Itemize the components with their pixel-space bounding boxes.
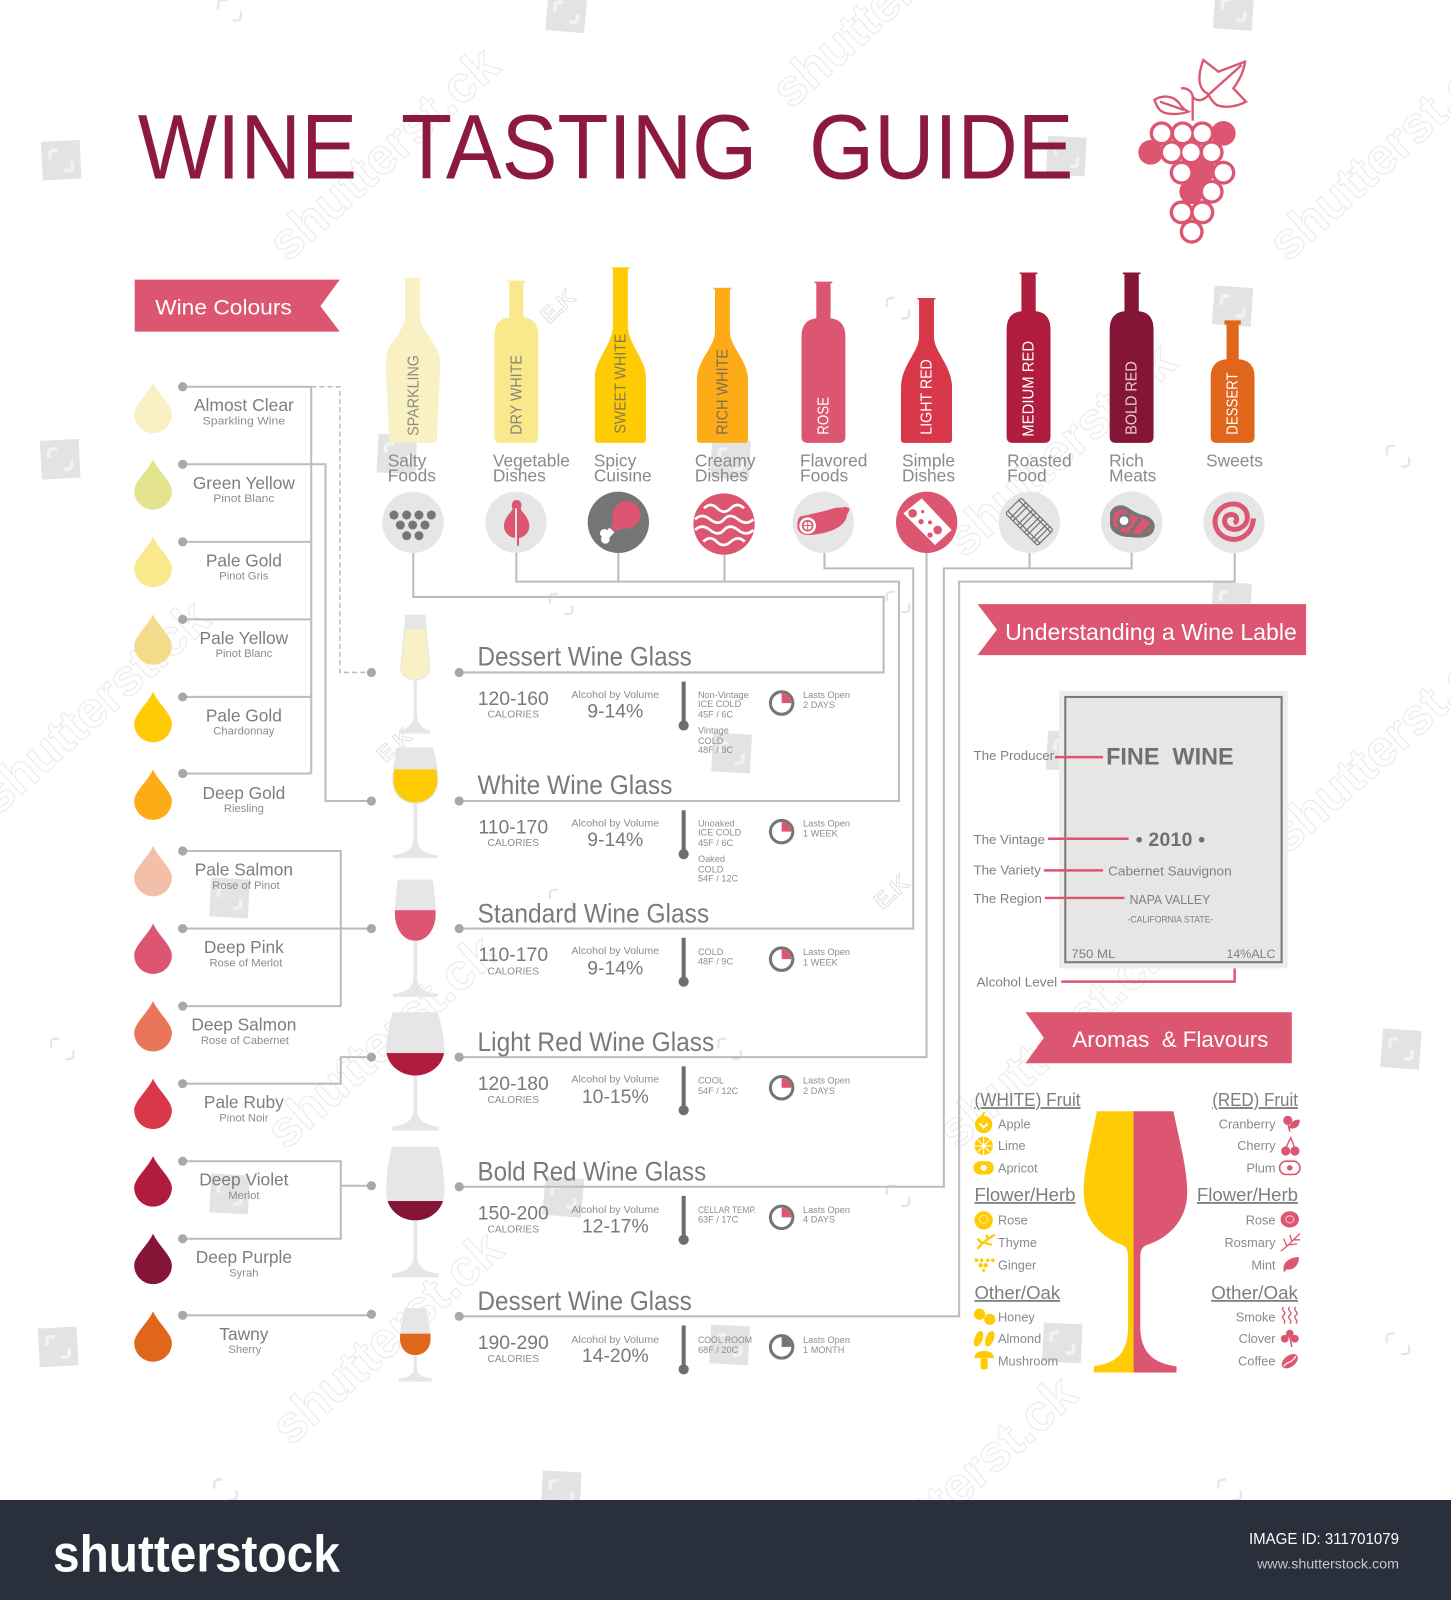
stats: Lasts Open — [803, 819, 850, 829]
stats: 68F / 20C — [698, 1345, 739, 1355]
stats: COLD — [698, 864, 724, 874]
banner: wine colours — [135, 280, 340, 332]
title: Bold Red Wine Glass — [478, 1157, 706, 1187]
colour: deep pink: Rose of Merlot — [209, 957, 283, 969]
stats: 54F / 12C — [698, 1086, 739, 1096]
stats: 12-17% — [582, 1216, 649, 1238]
panel: glass 3 standard — [393, 880, 850, 997]
stats: CALORIES — [487, 709, 539, 720]
title: White Wine Glass — [478, 770, 672, 800]
panel: food pairing labels: Sweets — [1206, 450, 1263, 470]
list items: Thyme — [998, 1235, 1037, 1250]
panel: glass 6 dessert — [399, 1286, 850, 1382]
bottle: bold red: BOLD RED — [1124, 361, 1141, 435]
colour: pale yellow: Pale Yellow — [200, 628, 289, 648]
panel: wine label diagram — [973, 691, 1288, 990]
colour: deep salmon: Rose of Cabernet — [201, 1035, 290, 1047]
icons: white aromas — [972, 1112, 996, 1369]
panel: glass 4 light red — [385, 1012, 850, 1131]
list items: Mint — [1251, 1257, 1276, 1272]
stats: COLD — [698, 736, 724, 746]
stats: 14-20% — [582, 1345, 649, 1367]
callout: the variety — [973, 862, 1103, 877]
heading: flower herb: Flower/Herb — [974, 1184, 1075, 1205]
stats: 1 MONTH — [803, 1345, 844, 1355]
stats: 45F / 6C — [698, 709, 733, 719]
watermark overlay: E.K — [536, 285, 580, 328]
glass illustration — [385, 1147, 446, 1278]
callout: the variety: The Variety — [973, 862, 1041, 877]
stats: Alcohol by Volume — [571, 1205, 660, 1216]
bottle: dessert: DESSERT — [1225, 372, 1242, 435]
stats: Alcohol by Volume — [571, 946, 660, 957]
panel: food pairing labels: Food — [1007, 466, 1047, 486]
icon: spicy chicken leg — [588, 492, 649, 553]
stats: 48F / 9C — [698, 745, 733, 755]
callout: alcohol level — [977, 968, 1235, 990]
stats: ICE COLD — [698, 828, 742, 838]
callout: the region: The Region — [973, 891, 1042, 906]
panel: food pairing labels — [388, 450, 1263, 486]
glass illustration — [393, 880, 438, 997]
colour: tawny: Sherry — [228, 1344, 262, 1356]
bottle: rich white — [697, 288, 748, 443]
panel: glass 5 bold red — [385, 1147, 850, 1278]
title: Standard Wine Glass — [478, 898, 709, 928]
label card: Cabernet Sauvignon — [1108, 864, 1232, 879]
title: Light Red Wine Glass — [478, 1027, 714, 1057]
label card: • 2010 • — [1136, 829, 1205, 851]
colour: pale salmon — [134, 846, 293, 896]
panel: food pairing labels: Dishes — [493, 466, 546, 486]
stats — [478, 810, 850, 884]
stats: Lasts Open — [803, 1076, 850, 1086]
heading: red fruit: (RED) Fruit — [1212, 1089, 1298, 1110]
stats: COOL ROOM — [698, 1335, 752, 1345]
list items: Lime — [998, 1138, 1026, 1153]
callout: the vintage: The Vintage — [973, 832, 1045, 847]
heading: white fruit: (WHITE) Fruit — [974, 1089, 1081, 1110]
watermark overlay: shutterst.ck — [933, 331, 1187, 567]
colour: green yellow — [134, 459, 295, 510]
panel: wine bottles — [386, 267, 1255, 443]
callout: the producer: The Producer — [973, 748, 1055, 763]
panel: food pairing labels: Flavored — [800, 450, 867, 470]
panel: glass 1 dessert (flute) — [399, 615, 850, 755]
panel: food pairing labels: Simple — [902, 450, 955, 470]
colour: pale yellow: Pinot Blanc — [215, 648, 273, 660]
stats — [478, 682, 850, 755]
watermark overlay: shutterst.ck — [257, 35, 510, 271]
panel: food pairing labels: Dishes — [902, 466, 955, 486]
panel: food pairing labels: Creamy — [695, 450, 756, 470]
stats: 48F / 9C — [698, 956, 733, 966]
title: WINE — [138, 97, 357, 199]
colour: deep salmon: Deep Salmon — [191, 1015, 296, 1035]
heading: other oak: Other/Oak — [974, 1282, 1061, 1303]
colour: green yellow: Green Yellow — [193, 473, 295, 493]
stats — [478, 938, 850, 987]
stats: 2 DAYS — [803, 1086, 835, 1096]
icon: salty foods — [382, 492, 444, 553]
stats: 110-170 — [478, 817, 548, 839]
colour: deep gold: Deep Gold — [202, 783, 285, 803]
logo: shutterstock — [53, 1525, 340, 1583]
icon: rich meats steak — [1101, 492, 1162, 553]
list items: Plum — [1246, 1160, 1275, 1175]
list items — [1219, 1117, 1276, 1368]
banner: understanding a wine label: Understanding a Wine Lable — [1005, 619, 1297, 645]
stats: Lasts Open — [803, 1335, 850, 1345]
stats: 9-14% — [587, 829, 643, 851]
stats: 1 WEEK — [803, 957, 839, 967]
bottle: dry white — [494, 281, 538, 443]
stats: Unoaked — [698, 819, 735, 829]
list items: Rose — [998, 1212, 1028, 1227]
colour: pale gold — [134, 537, 282, 587]
panel: food pairing labels: Roasted — [1007, 450, 1072, 470]
panel: food pairing labels: Cuisine — [594, 466, 652, 486]
stats: 1 WEEK — [803, 829, 839, 839]
panel: food pairing labels: Spicy — [594, 450, 637, 470]
panel: food pairing labels: Rich — [1109, 450, 1144, 470]
stats: 2 DAYS — [803, 700, 835, 710]
panel: white wine aromas — [972, 1089, 1081, 1369]
footer bar — [0, 1500, 1451, 1600]
list items: Almond — [998, 1331, 1041, 1346]
site url: www.shutterstock.com — [1256, 1556, 1399, 1572]
stats: Lasts Open — [803, 690, 850, 700]
stats: 190-290 — [478, 1332, 549, 1354]
list items: Rosmary — [1224, 1235, 1276, 1250]
stats: Oaked — [698, 854, 725, 864]
title: GUIDE — [809, 97, 1073, 199]
colour: pale gold chardonnay: Chardonnay — [213, 726, 275, 738]
stats: Lasts Open — [803, 947, 850, 957]
stats: Alcohol by Volume — [571, 1335, 660, 1346]
panel: red wine aromas — [1197, 1089, 1300, 1371]
stats: 110-170 — [478, 944, 548, 966]
colour: deep violet: Merlot — [228, 1190, 260, 1202]
panel: food pairing labels: Salty — [388, 450, 427, 470]
banner: understanding a wine label — [978, 604, 1306, 655]
list items — [998, 1117, 1058, 1368]
colour: tawny: Tawny — [219, 1324, 269, 1344]
bottle: rich white: RICH WHITE — [715, 349, 732, 435]
list items: Apple — [998, 1117, 1031, 1132]
stats: CALORIES — [487, 1095, 539, 1106]
colour: deep violet: Deep Violet — [199, 1170, 289, 1190]
list items: Cranberry — [1219, 1117, 1276, 1132]
bottle: medium red — [1007, 272, 1050, 443]
label card: FINE WINE — [1106, 743, 1234, 770]
banner: wine colours: Wine Colours — [155, 295, 292, 319]
panel: glass 2 white — [391, 748, 850, 884]
watermark overlay: shutterst.ck — [926, 923, 1180, 1159]
title: Dessert Wine Glass — [478, 1286, 692, 1316]
colour: almost clear: Almost Clear — [194, 395, 294, 415]
connector lines: food to glasses — [413, 552, 1235, 1321]
stats: COOL — [698, 1076, 724, 1086]
colour: green yellow: Pinot Blanc — [213, 493, 275, 505]
colour: pale ruby: Pale Ruby — [204, 1092, 284, 1112]
colour: tawny — [134, 1311, 269, 1362]
list items: Mushroom — [998, 1353, 1058, 1368]
list items: Honey — [998, 1309, 1035, 1324]
icon: sweets spiral — [1203, 492, 1265, 553]
list items: Clover — [1239, 1331, 1276, 1346]
watermark overlay: shutterst.ck — [255, 923, 508, 1159]
image id: IMAGE ID: 311701079 — [1249, 1531, 1399, 1548]
bottle: rose: ROSE — [816, 397, 833, 435]
panel: colour drops list — [134, 382, 376, 1362]
colour: deep purple: Deep Purple — [196, 1247, 292, 1267]
stats: 10-15% — [582, 1086, 649, 1108]
stats: Alcohol by Volume — [571, 690, 660, 701]
icons: red aromas — [1279, 1116, 1300, 1371]
icon: creamy waves — [693, 493, 755, 555]
colour: deep gold — [134, 769, 285, 820]
stats: ICE COLD — [698, 699, 742, 709]
bottle: sweet white: SWEET WHITE — [613, 334, 630, 434]
bottle: medium red: MEDIUM RED — [1021, 341, 1038, 437]
watermark overlay: E.K — [372, 723, 417, 767]
list items: Coffee — [1238, 1353, 1275, 1368]
stats — [478, 1066, 850, 1115]
stats: CELLAR TEMP. — [698, 1205, 756, 1215]
list items: Ginger — [998, 1257, 1037, 1272]
colour: deep purple — [134, 1234, 292, 1284]
heading: flower herb: Flower/Herb — [1197, 1184, 1298, 1205]
glass illustration — [391, 748, 440, 858]
bottle: light red: LIGHT RED — [919, 359, 936, 435]
stats: Lasts Open — [803, 1205, 850, 1215]
stats: CALORIES — [487, 966, 539, 977]
colour: deep salmon — [134, 1001, 296, 1052]
colour: pale ruby — [134, 1079, 284, 1129]
callout: the producer — [973, 748, 1103, 763]
label card: 750 ML — [1071, 947, 1115, 961]
watermark overlay: shutterst.ck — [835, 1364, 1088, 1600]
label card — [1059, 691, 1288, 968]
icon: vegetable — [485, 492, 547, 553]
label card: -CALIFORNIA STATE- — [1128, 914, 1213, 924]
banner: aromas and flavours — [1025, 1012, 1292, 1063]
stats: 9-14% — [587, 957, 643, 979]
panel: food pairing labels: Foods — [800, 466, 848, 486]
list items: Cherry — [1237, 1138, 1276, 1153]
stats: CALORIES — [487, 1354, 539, 1365]
bottle: rose — [802, 282, 845, 443]
connector lines: colours to glasses — [178, 382, 376, 1320]
bottle: sparkling: SPARKLING — [405, 355, 422, 436]
icon: flavored sausage — [793, 492, 854, 553]
list items: Smoke — [1236, 1309, 1275, 1324]
colour: pale gold chardonnay: Pale Gold — [206, 705, 282, 725]
list items: Rose — [1246, 1212, 1275, 1227]
title: TASTING — [401, 97, 757, 199]
watermark overlay: E.K — [869, 870, 914, 914]
stats: 120-180 — [478, 1073, 549, 1095]
stats: 150-200 — [478, 1202, 549, 1224]
label card: NAPA VALLEY — [1130, 892, 1210, 907]
stats — [478, 1196, 850, 1245]
panel: food pairing labels: Foods — [388, 466, 436, 486]
colour: almost clear — [134, 383, 294, 433]
bottle: sweet white — [595, 267, 646, 443]
colour: pale salmon: Pale Salmon — [195, 860, 293, 880]
stats: 120-160 — [478, 688, 549, 710]
stats: Alcohol by Volume — [571, 1075, 660, 1086]
colour: pale gold: Pinot Gris — [219, 571, 269, 583]
callout: alcohol level: Alcohol Level — [977, 975, 1057, 990]
heading: other oak: Other/Oak — [1211, 1282, 1299, 1303]
list items: Apricot — [998, 1160, 1038, 1175]
colour: pale ruby: Pinot Noir — [219, 1112, 269, 1124]
stats: 63F / 17C — [698, 1214, 739, 1224]
bottle: sparkling — [386, 278, 440, 443]
icon: roasted food grill — [999, 492, 1060, 553]
colour: pale gold: Pale Gold — [206, 550, 282, 570]
title — [138, 97, 1073, 199]
colour: deep purple: Syrah — [229, 1268, 259, 1280]
colour: almost clear: Sparkling Wine — [203, 415, 285, 427]
colour: pale gold chardonnay — [134, 692, 282, 742]
colour: deep violet — [134, 1156, 289, 1207]
stats: 45F / 6C — [698, 838, 733, 848]
stats: CALORIES — [487, 1225, 539, 1236]
stats: Non-Vintage — [698, 690, 749, 700]
bottle: light red — [901, 298, 952, 443]
title: Dessert Wine Glass — [478, 641, 692, 671]
panel: food pairing labels: Vegetable — [493, 450, 570, 470]
bottle: dry white: DRY WHITE — [508, 355, 525, 435]
banner: aromas and flavours: Aromas & Flavours — [1072, 1027, 1268, 1052]
colour: deep gold: Riesling — [224, 803, 264, 815]
stats: Alcohol by Volume — [571, 819, 660, 830]
stats: CALORIES — [487, 838, 539, 849]
label card: 14%ALC — [1227, 947, 1276, 961]
stats — [478, 1326, 850, 1374]
bottle: dessert — [1211, 320, 1255, 443]
panel: food pairing labels: Dishes — [695, 466, 748, 486]
colour: pale salmon: Rose of Pinot — [212, 880, 280, 892]
icon: simple dishes — [896, 492, 957, 553]
colour: deep pink — [134, 923, 284, 974]
watermark overlay: shutterst.ck — [260, 1219, 513, 1455]
icon: grape bunch — [1138, 60, 1246, 244]
bottle: bold red — [1110, 272, 1154, 443]
glass illustration — [399, 615, 432, 734]
colour: pale yellow — [134, 614, 289, 665]
stats: COLD — [698, 947, 724, 957]
colour: deep pink: Deep Pink — [204, 937, 284, 957]
stats: 9-14% — [587, 700, 643, 722]
chart: split wine glass — [1084, 1111, 1187, 1372]
stats: 54F / 12C — [698, 874, 739, 884]
glass illustration — [399, 1308, 432, 1382]
stats: Vintage — [698, 726, 729, 736]
panel: food pairing labels: Meats — [1109, 466, 1157, 486]
glass illustration — [385, 1012, 446, 1131]
stats: 4 DAYS — [803, 1214, 835, 1224]
